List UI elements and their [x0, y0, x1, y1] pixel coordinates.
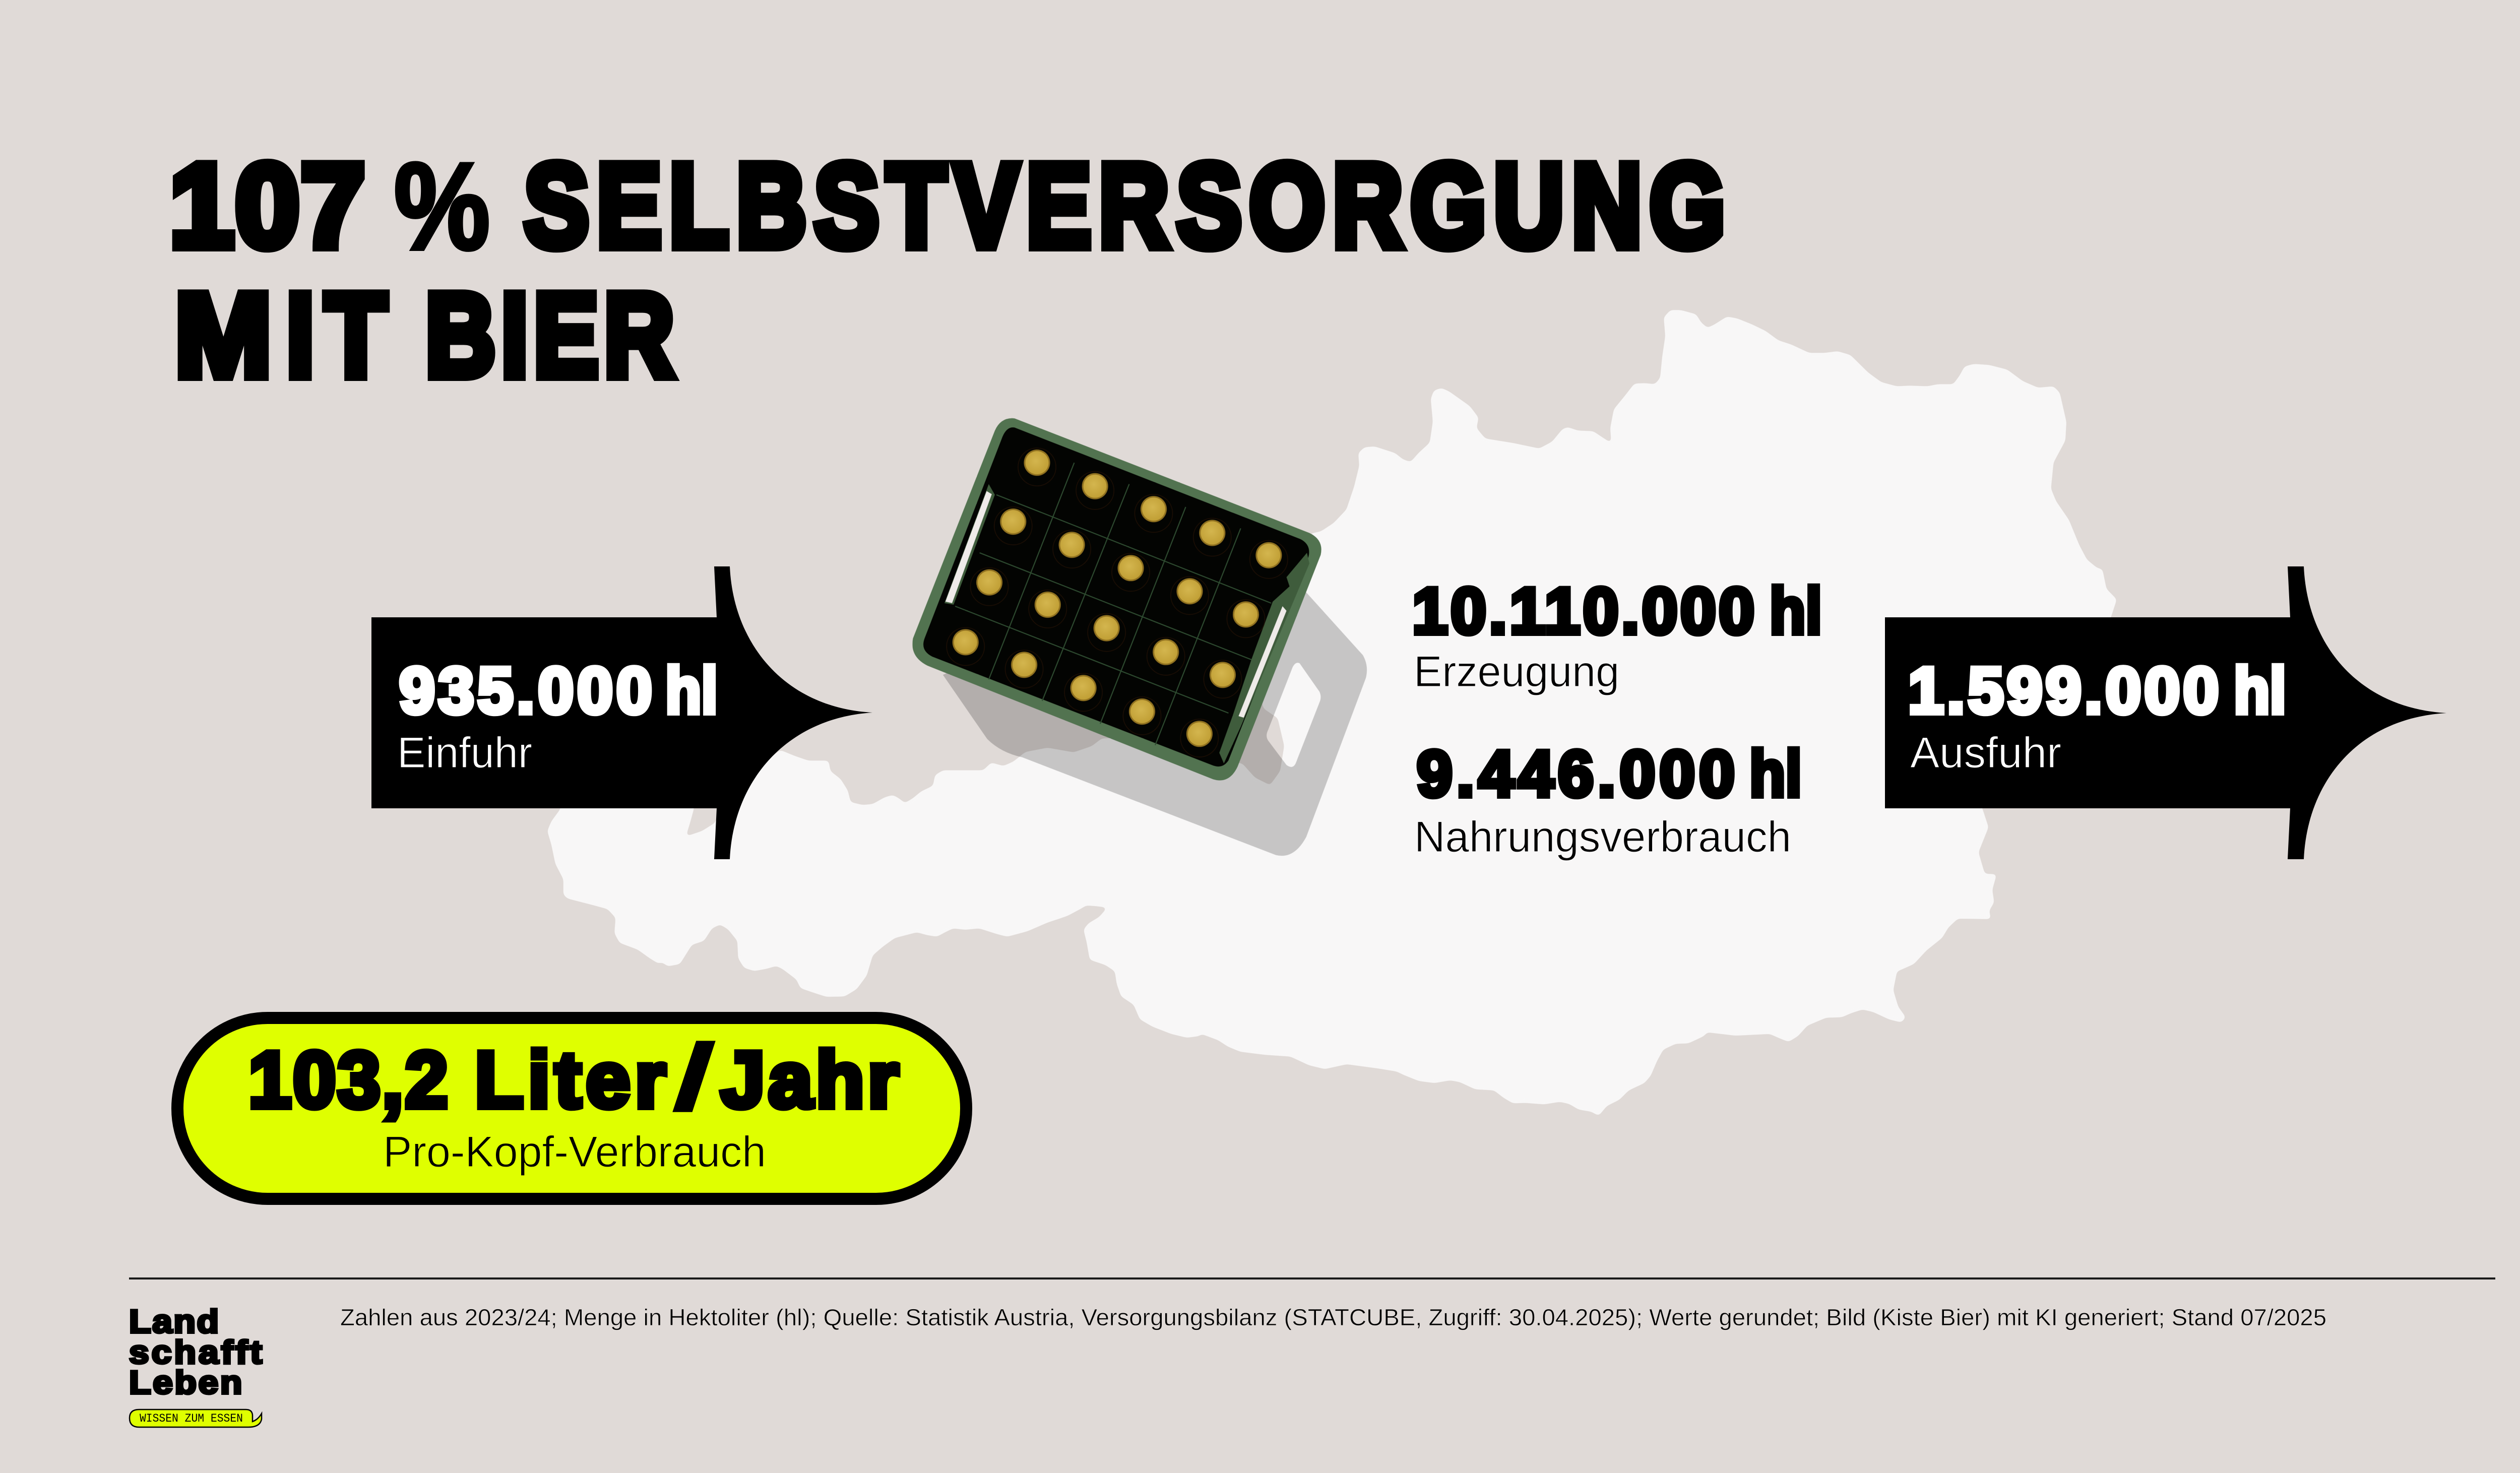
- production stat: [1412, 574, 1822, 696]
- production stat: hl: [1770, 574, 1822, 648]
- crate left inner wall: [944, 484, 995, 605]
- per-capita value: 103,2: [248, 1035, 448, 1124]
- crate shadow: [943, 556, 1367, 856]
- export label: Ausfuhr: [1910, 729, 2061, 777]
- title: 107: [170, 140, 365, 272]
- logo tagline badge: [130, 1410, 262, 1427]
- per-capita label: Pro-Kopf-Verbrauch: [383, 1128, 766, 1176]
- export arrow: [1885, 566, 2446, 859]
- beer crate with shadow: [912, 418, 1367, 856]
- source note: Zahlen aus 2023/24; Menge in Hektoliter (hl); Quelle: Statistik Austria, Versorgungsbilanz (STATCUBE, Zugriff: 30.04.2025); Werte gerundet; Bild (Kiste Bier) mit KI generiert; Stand 07/2025: [340, 1304, 2326, 1330]
- map: Austria silhouette: [547, 310, 2117, 1116]
- title: SELBSTVERSORGUNG: [524, 139, 1725, 272]
- title: [170, 137, 1725, 402]
- bottle caps: [947, 448, 1288, 757]
- import value: 935.000: [399, 654, 652, 727]
- import label: Einfuhr: [397, 729, 532, 777]
- title: %: [394, 137, 490, 275]
- per-capita value: Jahr: [721, 1036, 899, 1124]
- crate right inner wall: [1219, 553, 1309, 763]
- production stat: Erzeugung: [1414, 648, 1619, 696]
- food consumption stat: Nahrungsverbrauch: [1414, 813, 1791, 861]
- food consumption stat: 9.446.000: [1417, 737, 1735, 810]
- per-capita pill: [177, 1018, 966, 1199]
- per-capita value: [248, 1024, 899, 1131]
- logo: Leben: [129, 1364, 242, 1401]
- title: I: [286, 270, 314, 402]
- import arrow: [371, 566, 872, 859]
- footer rule: [129, 1277, 2495, 1279]
- crate dividers: [955, 463, 1271, 745]
- crate interior: [923, 427, 1309, 766]
- per-capita value: Liter: [475, 1036, 666, 1124]
- import value: hl: [665, 654, 718, 727]
- title: M: [175, 269, 272, 402]
- production stat: 10.110.000: [1412, 574, 1754, 648]
- logo: Land: [129, 1303, 219, 1340]
- export value: hl: [2234, 654, 2286, 727]
- title: BIER: [425, 269, 674, 401]
- per-capita value: /: [671, 1024, 717, 1131]
- title: T: [325, 270, 387, 402]
- logo: schafft: [129, 1334, 262, 1371]
- export value: 1.599.000: [1908, 654, 2219, 727]
- crate rim: [912, 418, 1321, 781]
- handle slots: [946, 491, 1287, 718]
- food consumption stat: [1414, 737, 1802, 861]
- logo tagline: WISSEN ZUM ESSEN: [140, 1412, 243, 1425]
- logo: [129, 1303, 262, 1427]
- food consumption stat: hl: [1749, 737, 1802, 810]
